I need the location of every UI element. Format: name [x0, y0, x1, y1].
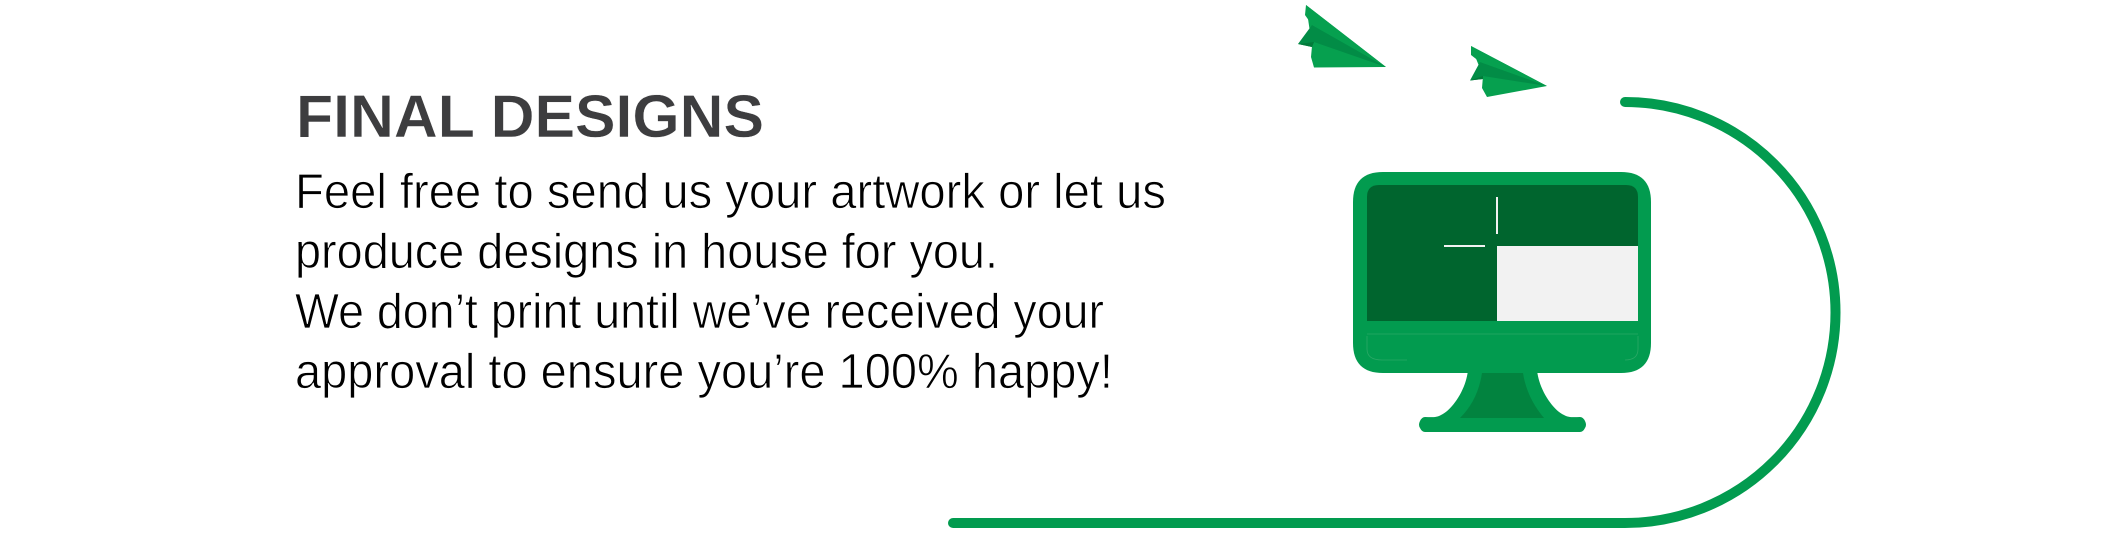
bottom bezel outline [1367, 334, 1638, 360]
monitor stand [1419, 370, 1586, 432]
icon: paper plane large [1298, 5, 1386, 68]
body text block: Feel free to send us your artwork or let us [295, 165, 1166, 219]
body text block: approval to ensure you’re 100% happy! [295, 345, 1113, 399]
curved arrow path line [953, 102, 1836, 523]
body text block: We don’t print until we’ve received your [295, 285, 1104, 339]
body text block: produce designs in house for you. [295, 225, 998, 279]
heading: final designs: FINAL DESIGNS [296, 83, 764, 150]
stand inner shade [1460, 373, 1544, 418]
crop mark vertical [1496, 197, 1498, 234]
monitor body [1353, 172, 1651, 373]
crop mark horizontal [1444, 245, 1485, 247]
body text block [295, 165, 1166, 399]
screen [1367, 185, 1638, 321]
white panel on screen [1497, 246, 1638, 321]
icon: paper plane small [1470, 46, 1547, 97]
icon: desktop monitor [1353, 172, 1651, 432]
